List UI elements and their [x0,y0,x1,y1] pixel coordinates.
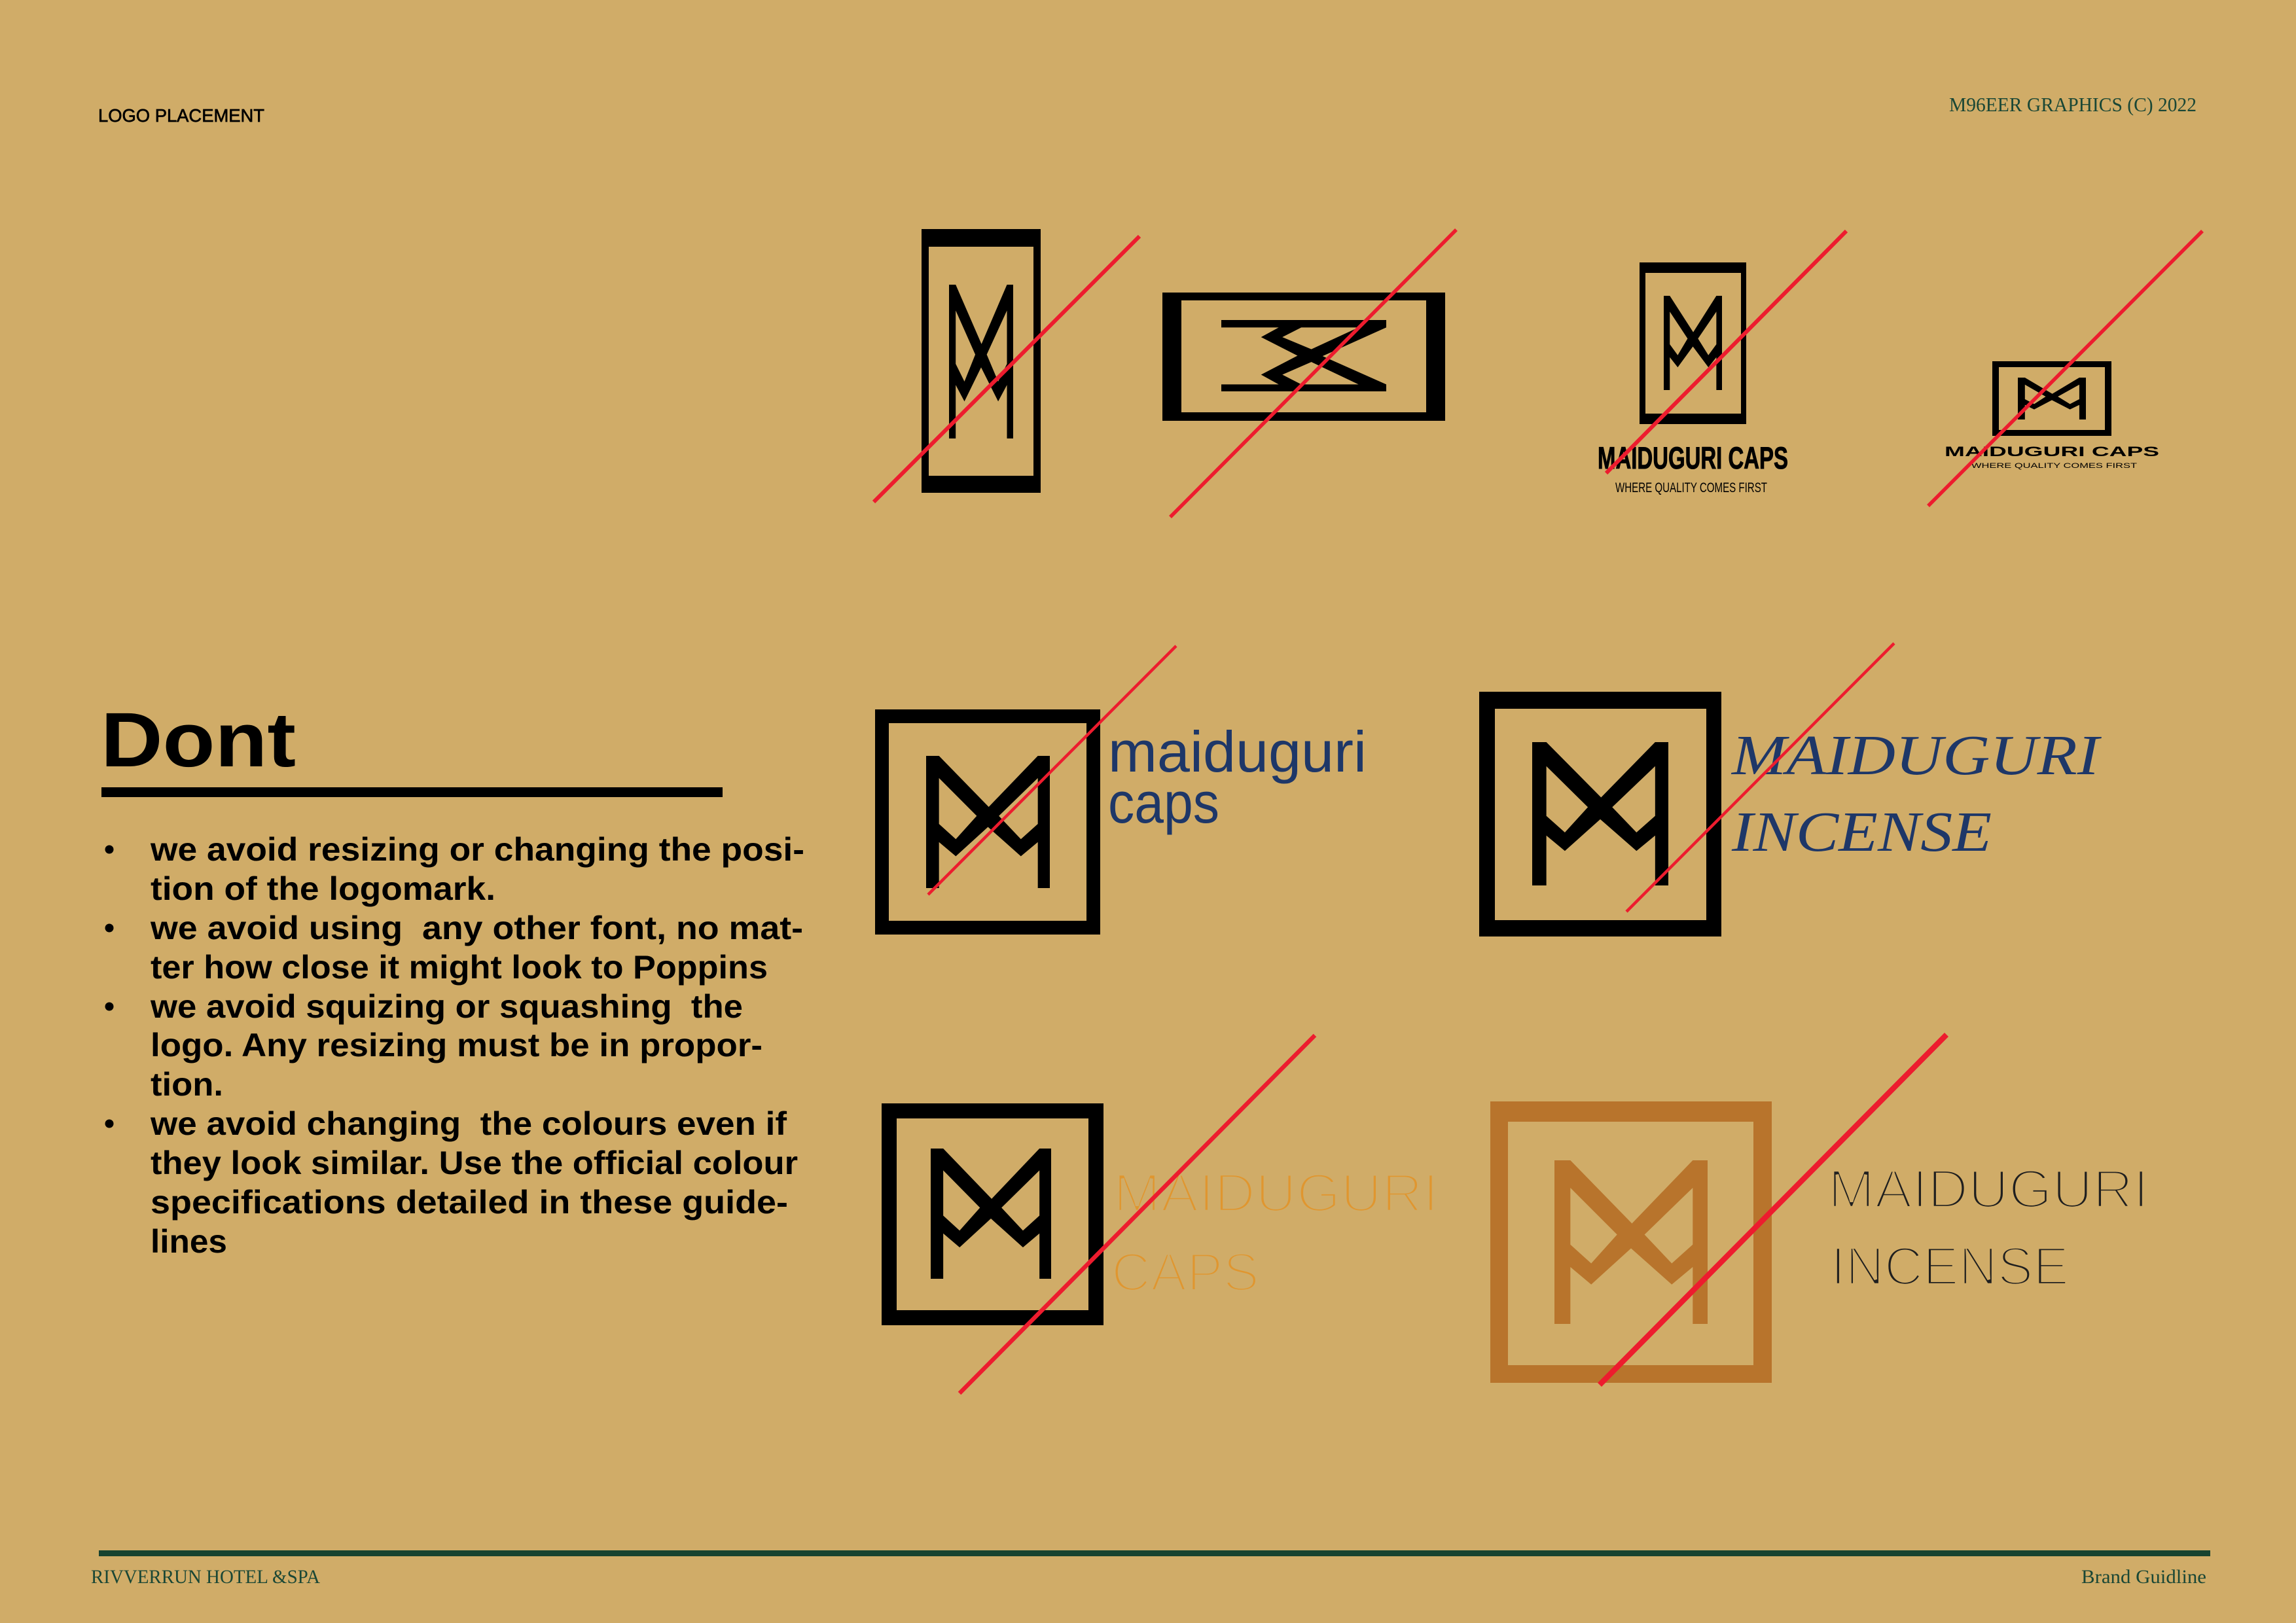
bullet 3: tion. [151,1066,223,1103]
misuse 7: wrong wordmark colour [882,1035,1439,1393]
bullet 1: we avoid resizing or changing the posi- [150,831,804,868]
bullet 3: logo. Any resizing must be in propor- [151,1027,762,1063]
misuse 8: wrong logomark colour: MAIDUGURI [1828,1158,2149,1219]
misuse 6: wrong italic serif font: INCENSE [1731,800,1992,863]
misuse 5: wrong sans font: caps [1108,770,1219,835]
panel: dont guidance [101,697,804,1260]
bullet 4: we avoid changing the colours even if [150,1105,787,1142]
misuse 6: wrong italic serif font: MAIDUGURI [1731,723,2102,787]
bullet 3: we avoid squizing or squashing the [150,988,743,1025]
footer rule [99,1550,2210,1556]
misuse 2: logo rotated and stretched [1162,230,1456,517]
heading: Dont: Dont [101,697,296,783]
misuse 8: wrong logomark colour [1490,1035,2149,1385]
misuse 5: wrong sans font: maiduguri [1108,719,1367,784]
misuse 5: wrong sans font [875,646,1367,935]
misuse 7: wrong wordmark colour: CAPS [1111,1241,1259,1302]
bullet 2: ter how close it might look to Poppins [151,949,768,986]
bullet 2 [105,910,803,986]
section label: logo placement: LOGO PLACEMENT [98,105,264,126]
bullet 3 [105,988,762,1103]
misuse 6: wrong italic serif font [1479,643,2102,936]
header credit: M96EER GRAPHICS (C) 2022 [1949,93,2197,116]
bullet list [105,831,804,1260]
misuse 3: stacked logo squeezed narrow [1598,231,1846,495]
bullet 4: they look similar. Use the official colour [151,1145,798,1181]
misuse 3: stacked logo squeezed narrow: MAIDUGURI CAPS [1598,440,1788,475]
misuse 4: stacked logo squashed wide: MAIDUGURI CAPS [1945,444,2159,459]
misuse 3: stacked logo squeezed narrow: WHERE QUALITY COMES FIRST [1615,480,1767,495]
bullet 4 [105,1105,798,1260]
footer: document title: Brand Guidline [2081,1566,2206,1588]
heading rule [101,787,723,797]
bullet 1: tion of the logomark. [151,870,495,907]
bullet 1 [105,831,804,907]
misuse 7: wrong wordmark colour: MAIDUGURI [1113,1162,1439,1223]
misuse 8: wrong logomark colour: INCENSE [1831,1236,2069,1296]
misuse 4: stacked logo squashed wide: WHERE QUALITY COMES FIRST [1971,462,2137,470]
bullet 2: we avoid using any other font, no mat- [150,910,803,946]
bullet 4: lines [151,1223,227,1260]
bullet 4: specifications detailed in these guide- [151,1184,788,1221]
footer: hotel name: RIVVERRUN HOTEL &SPA [91,1566,320,1588]
misuse 1: logo squeezed narrow [874,229,1139,502]
misuse 4: stacked logo squashed wide [1928,231,2202,506]
